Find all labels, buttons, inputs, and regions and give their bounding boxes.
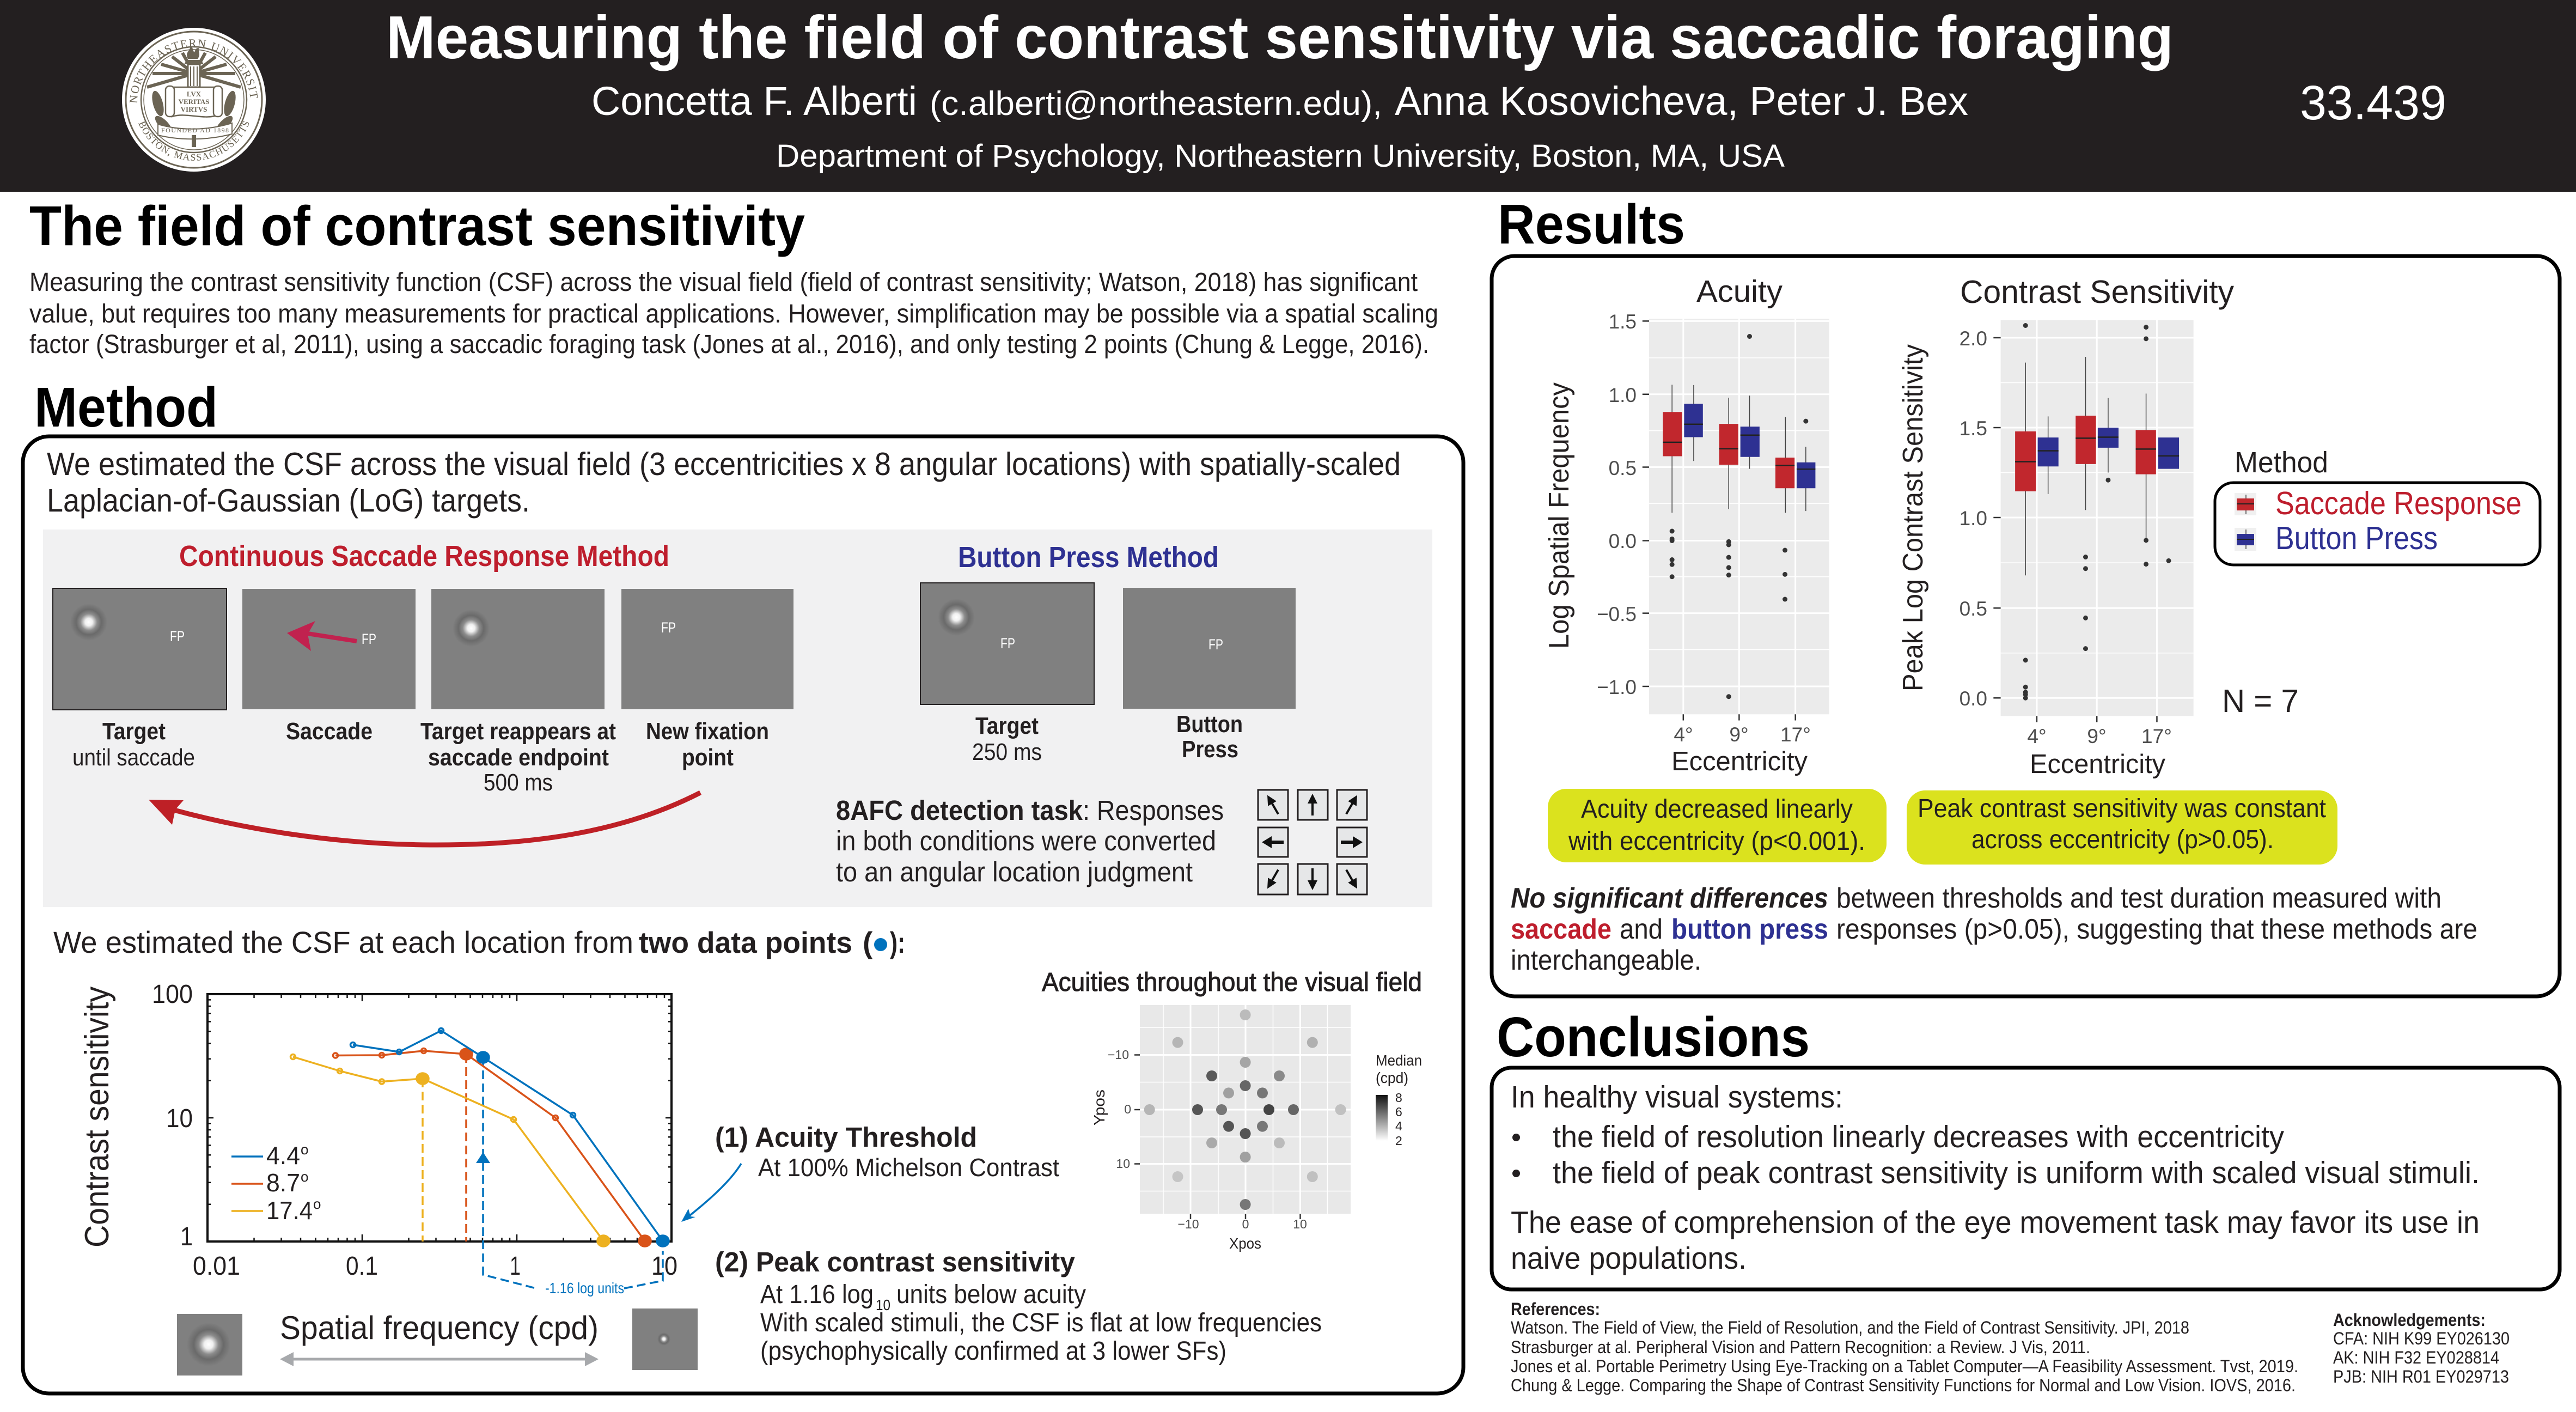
icon: 8 direction response keys <box>1258 790 1367 894</box>
icon: Northeastern University seal: LVX <box>187 90 202 98</box>
series: 17.4 deg <box>291 1055 609 1246</box>
references <box>1511 1299 2298 1395</box>
label: target until saccade: until saccade <box>72 744 195 771</box>
chart: acuity map: 0 <box>1242 1217 1249 1231</box>
acknowledgements: CFA: NIH K99 EY026130 <box>2333 1329 2510 1348</box>
heading: Method: Method <box>34 376 218 439</box>
chart: contrast sensitivity box plot: 4° <box>2027 725 2047 747</box>
results summary text: saccade <box>1511 914 1611 945</box>
callout: acuity result: Acuity decreased linearly <box>1581 795 1853 824</box>
8AFC task description: : Responses <box>1083 795 1224 826</box>
header band <box>0 0 2576 192</box>
y axis title: Contrast sensitivity <box>78 987 116 1247</box>
label: -1.16 log units: -1.16 log units <box>545 1280 624 1297</box>
sample size: N = 7 <box>2222 683 2299 719</box>
label: new fixation point <box>646 718 769 771</box>
8AFC task description: 8AFC detection task <box>836 795 1083 826</box>
method intro text <box>47 446 1401 519</box>
screen: button target <box>920 583 1094 704</box>
chart: acuity map: 0 <box>1124 1102 1131 1116</box>
axis tick labels <box>152 980 677 1281</box>
chart: contrast sensitivity box plot: Contrast Sensitivity <box>1960 274 2234 310</box>
chart: acuity map <box>1091 1005 1422 1252</box>
callout: contrast sensitivity result: Peak contrast sensitivity was constant <box>1918 794 2326 823</box>
closing statement <box>1511 1205 2480 1276</box>
bullet list <box>1512 1119 2480 1190</box>
text: acuity threshold: (1) Acuity Threshold <box>715 1122 977 1153</box>
callout: contrast sensitivity result <box>1907 790 2337 865</box>
label: button press: Button <box>1176 711 1243 738</box>
chart: contrast sensitivity box plot: 2.0 <box>1960 327 1987 350</box>
chart: acuity box plot: 1.0 <box>1609 384 1637 406</box>
legend: method <box>2215 446 2540 565</box>
affiliation: Department of Psychology, Northeastern University, Boston, MA, USA <box>776 138 1785 174</box>
label: new fixation point: point <box>682 744 734 771</box>
intro text block: Measuring the contrast sensitivity function (CSF) across the visual field (field of contrast sensitivity; Watson, 2018) has significant <box>29 268 1418 297</box>
chart: acuity box plot: 17° <box>1780 723 1811 746</box>
chart: contrast sensitivity box plot: Eccentricity <box>2030 750 2165 779</box>
results summary text <box>1511 882 2477 976</box>
axis tick labels: 10 <box>651 1252 677 1281</box>
legend: method: Saccade Response <box>2275 485 2522 521</box>
closing statement: The ease of comprehension of the eye movement task may favor its use in <box>1511 1205 2480 1240</box>
chart legend: 4.4 <box>266 1141 300 1170</box>
8AFC task description: in both conditions were converted <box>836 825 1216 856</box>
text: two data points: two data points <box>639 926 852 959</box>
text: two data points: ): <box>890 926 905 959</box>
text: acuity threshold <box>715 1122 1059 1182</box>
chart: acuity box plot: Log Spatial Frequency <box>1543 382 1575 649</box>
stimulus: high spatial frequency <box>632 1308 698 1370</box>
results summary text: button press <box>1671 914 1828 945</box>
results summary text: No significant differences <box>1511 882 1828 914</box>
authors: Concetta F. Alberti <box>591 78 917 124</box>
chart: acuity box plot: Eccentricity <box>1671 747 1808 776</box>
closing statement: naive populations. <box>1511 1241 1747 1276</box>
acuity map colour bar: 6 <box>1395 1105 1402 1119</box>
callout: acuity result <box>1548 789 1887 862</box>
text: peak contrast sensitivity: (2) Peak contrast sensitivity <box>715 1246 1076 1277</box>
screen: target reappears <box>431 589 605 709</box>
screen: button target: FP <box>1000 635 1015 652</box>
text: peak contrast sensitivity: (psychophysically confirmed at 3 lower SFs) <box>760 1337 1226 1366</box>
heading: Conclusions: Conclusions <box>1497 1006 1810 1068</box>
acuity map colour bar <box>1376 1052 1422 1148</box>
label: button press <box>1176 711 1243 763</box>
chart: acuity box plot: −1.0 <box>1597 676 1637 698</box>
chart: contrast sensitivity box plot: 1.5 <box>1960 417 1987 440</box>
chart: acuity box plot: −0.5 <box>1597 603 1637 625</box>
bullet list: the field of peak contrast sensitivity is uniform with scaled visual stimuli. <box>1553 1155 2480 1190</box>
results summary text: and <box>1620 914 1663 945</box>
legend: method: Button Press <box>2275 520 2438 556</box>
method intro text: Laplacian-of-Gaussian (LoG) targets. <box>47 483 530 519</box>
icon: Northeastern University seal: BOSTON, MASSACHUSETTS <box>138 121 249 161</box>
chart: acuity map: 10 <box>1293 1217 1307 1231</box>
screen: target <box>53 588 227 710</box>
label: target reappears: 500 ms <box>484 769 553 796</box>
authors <box>591 78 1968 124</box>
label: button press: Press <box>1182 736 1238 763</box>
references: Strasburger at al. Peripheral Vision and Pattern Recognition: a Review. J Vis, 2011. <box>1511 1337 2090 1357</box>
label: target 250 ms: 250 ms <box>972 739 1042 765</box>
series: 4.4 deg <box>351 1028 669 1246</box>
panel: conclusions <box>1492 1068 2560 1289</box>
authors: (c.alberti@northeastern.edu), <box>930 85 1382 123</box>
title: Measuring the field of contrast sensitivity via saccadic foraging <box>386 4 2174 71</box>
label: target 250 ms <box>972 713 1042 765</box>
references: Jones et al. Portable Perimetry Using Eye-Tracking on a Tablet Computer—A Feasibility Assessment. Tvst, 2019. <box>1511 1356 2298 1376</box>
heading: continuous saccade method: Continuous Saccade Response Method <box>179 540 669 573</box>
chart: acuity box plot: 9° <box>1729 723 1749 746</box>
dashed lines to peak points <box>423 1054 663 1288</box>
screen: button press: FP <box>1208 636 1223 653</box>
results summary text: between thresholds and test duration measured with <box>1836 882 2441 914</box>
label: target 250 ms: Target <box>975 713 1039 739</box>
acuity map colour bar: 8 <box>1395 1091 1402 1105</box>
text: peak contrast sensitivity: 10 <box>876 1297 890 1313</box>
chart: acuity box plot: 1.5 <box>1609 311 1637 333</box>
series: 8.7 deg <box>333 1048 651 1246</box>
chart: contrast sensitivity box plot: Peak Log Contrast Sensitivity <box>1897 344 1929 691</box>
screen: target: FP <box>170 628 185 644</box>
acuity map colour bar: (cpd) <box>1376 1069 1408 1086</box>
arrow: acuity threshold <box>681 1164 741 1222</box>
axis tick labels: 1 <box>510 1252 521 1281</box>
callout: acuity result: with eccentricity (p<0.001). <box>1568 827 1865 856</box>
screen: new fixation <box>621 589 793 709</box>
poster number: 33.439 <box>2300 75 2446 130</box>
label: saccade: Saccade <box>286 718 373 745</box>
acknowledgements: Acknowledgements: <box>2333 1310 2486 1330</box>
panel: method <box>23 436 1463 1393</box>
chart: contrast sensitivity function <box>78 980 677 1297</box>
acuity map colour bar: 4 <box>1395 1119 1402 1133</box>
acknowledgements: AK: NIH F32 EY028814 <box>2333 1348 2499 1367</box>
heading: The field of contrast sensitivity: The field of contrast sensitivity <box>29 194 805 257</box>
arrow: trial loop <box>149 793 700 845</box>
screen: saccade <box>242 589 416 709</box>
icon: Northeastern University seal <box>122 28 266 172</box>
screen: saccade: FP <box>362 631 376 647</box>
8AFC task description: to an angular location judgment <box>836 856 1193 887</box>
results summary text: interchangeable. <box>1511 945 1701 976</box>
text: peak contrast sensitivity: units below acuity <box>896 1280 1086 1309</box>
chart: acuity box plot: 0.5 <box>1609 457 1637 479</box>
chart: acuity map: −10 <box>1108 1048 1129 1062</box>
text: two data points: We estimated the CSF at each location from <box>53 925 633 959</box>
panel: task procedures <box>43 530 1432 907</box>
arrow: log unit shift <box>476 1152 490 1163</box>
results summary text: responses (p>0.05), suggesting that these methods are <box>1836 914 2477 945</box>
chart: acuity map: −10 <box>1177 1217 1199 1231</box>
chart legend <box>231 1141 321 1225</box>
text: peak contrast sensitivity: At 1.16 log <box>760 1280 874 1309</box>
intro text block: factor (Strasburger et al, 2011), using a saccadic foraging task (Jones at al., 2016), and only testing 2 points (Chung & Legge, 2016). <box>29 330 1429 359</box>
chart: acuity box plot: Acuity <box>1696 274 1783 309</box>
axis tick labels: 100 <box>152 980 193 1009</box>
axis tick labels: 0.1 <box>346 1252 378 1281</box>
chart: contrast sensitivity box plot: 1.0 <box>1960 507 1987 530</box>
screen: new fixation: FP <box>661 619 676 636</box>
references: References: <box>1511 1299 1600 1319</box>
axis tick labels: 1 <box>180 1222 193 1251</box>
bullet list: the field of resolution linearly decreases with eccentricity <box>1553 1119 2284 1154</box>
x axis title: Spatial frequency (cpd) <box>280 1310 599 1346</box>
screen: button press <box>1123 588 1296 709</box>
chart legend: o <box>301 1168 308 1185</box>
label: target reappears <box>420 718 616 796</box>
plot frame and ticks <box>207 994 672 1241</box>
chart: contrast sensitivity box plot <box>1897 274 2234 779</box>
chart heading: acuities: Acuities throughout the visual field <box>1042 968 1422 997</box>
chart legend: o <box>313 1196 321 1212</box>
text: two data points: ( <box>863 926 873 959</box>
heading: button press method: Button Press Method <box>958 541 1219 574</box>
panel: conclusions: In healthy visual systems: <box>1511 1080 1843 1115</box>
acuity map colour bar: Median <box>1376 1052 1422 1069</box>
method intro text: We estimated the CSF across the visual field (3 eccentricities x 8 angular locations) with spatially-scaled <box>47 446 1401 482</box>
chart legend: 17.4 <box>266 1196 313 1225</box>
chart: acuity map: Xpos <box>1229 1235 1261 1252</box>
legend: method: Method <box>2235 446 2328 479</box>
chart legend: o <box>301 1141 308 1158</box>
authors: Anna Kosovicheva, Peter J. Bex <box>1395 78 1968 124</box>
acuity map colour bar: 2 <box>1395 1134 1402 1148</box>
acknowledgements <box>2333 1310 2510 1386</box>
chart: acuity box plot <box>1543 274 1829 776</box>
text: acuity threshold: At 100% Michelson Contrast <box>758 1153 1059 1182</box>
stimulus: low spatial frequency <box>177 1314 242 1376</box>
chart: acuity box plot: 4° <box>1674 723 1693 746</box>
panel: results <box>1492 256 2560 996</box>
intro text block <box>29 268 1438 359</box>
label: target until saccade <box>72 718 195 771</box>
icon: Northeastern University seal: VERITAS <box>179 98 209 106</box>
axis tick labels: 10 <box>166 1104 193 1133</box>
chart: contrast sensitivity box plot: 9° <box>2087 725 2107 747</box>
label: target reappears: Target reappears at <box>420 718 616 745</box>
text: peak contrast sensitivity: With scaled stimuli, the CSF is flat at low frequencies <box>760 1308 1322 1337</box>
chart: acuity map: 10 <box>1116 1157 1130 1171</box>
label: target reappears: saccade endpoint <box>428 744 609 771</box>
chart: acuity box plot: 0.0 <box>1609 530 1637 552</box>
text: peak contrast sensitivity <box>715 1246 1322 1366</box>
acknowledgements: PJB: NIH R01 EY029713 <box>2333 1367 2509 1386</box>
axis tick labels: 0.01 <box>193 1252 240 1281</box>
callout: contrast sensitivity result: across eccentricity (p>0.05). <box>1971 825 2274 854</box>
references: Watson. The Field of View, the Field of Resolution, and the Field of Contrast Sensitivity. JPI, 2018 <box>1511 1318 2189 1337</box>
icon: Northeastern University seal: VIRTVS <box>181 105 207 113</box>
chart: contrast sensitivity box plot: 0.0 <box>1960 687 1987 710</box>
arrow: spatial frequency range <box>280 1352 599 1366</box>
8AFC task description <box>836 795 1224 887</box>
chart: contrast sensitivity box plot: 0.5 <box>1960 598 1987 620</box>
references: Chung & Legge. Comparing the Shape of Contrast Sensitivity Functions for Normal and Low Vision. IOVS, 2016. <box>1511 1376 2296 1395</box>
heading: Results: Results <box>1498 193 1685 255</box>
label: target until saccade: Target <box>102 718 166 745</box>
label: new fixation point: New fixation <box>646 718 769 745</box>
chart: acuity map: Ypos <box>1091 1090 1108 1125</box>
chart: contrast sensitivity box plot: 17° <box>2141 725 2172 747</box>
intro text block: value, but requires too many measurements for practical applications. However, simplification may be possible via a spatial scaling <box>29 300 1438 328</box>
chart legend: 8.7 <box>266 1168 300 1197</box>
icon: Northeastern University seal: FOUNDED AD 1898 <box>161 126 229 134</box>
